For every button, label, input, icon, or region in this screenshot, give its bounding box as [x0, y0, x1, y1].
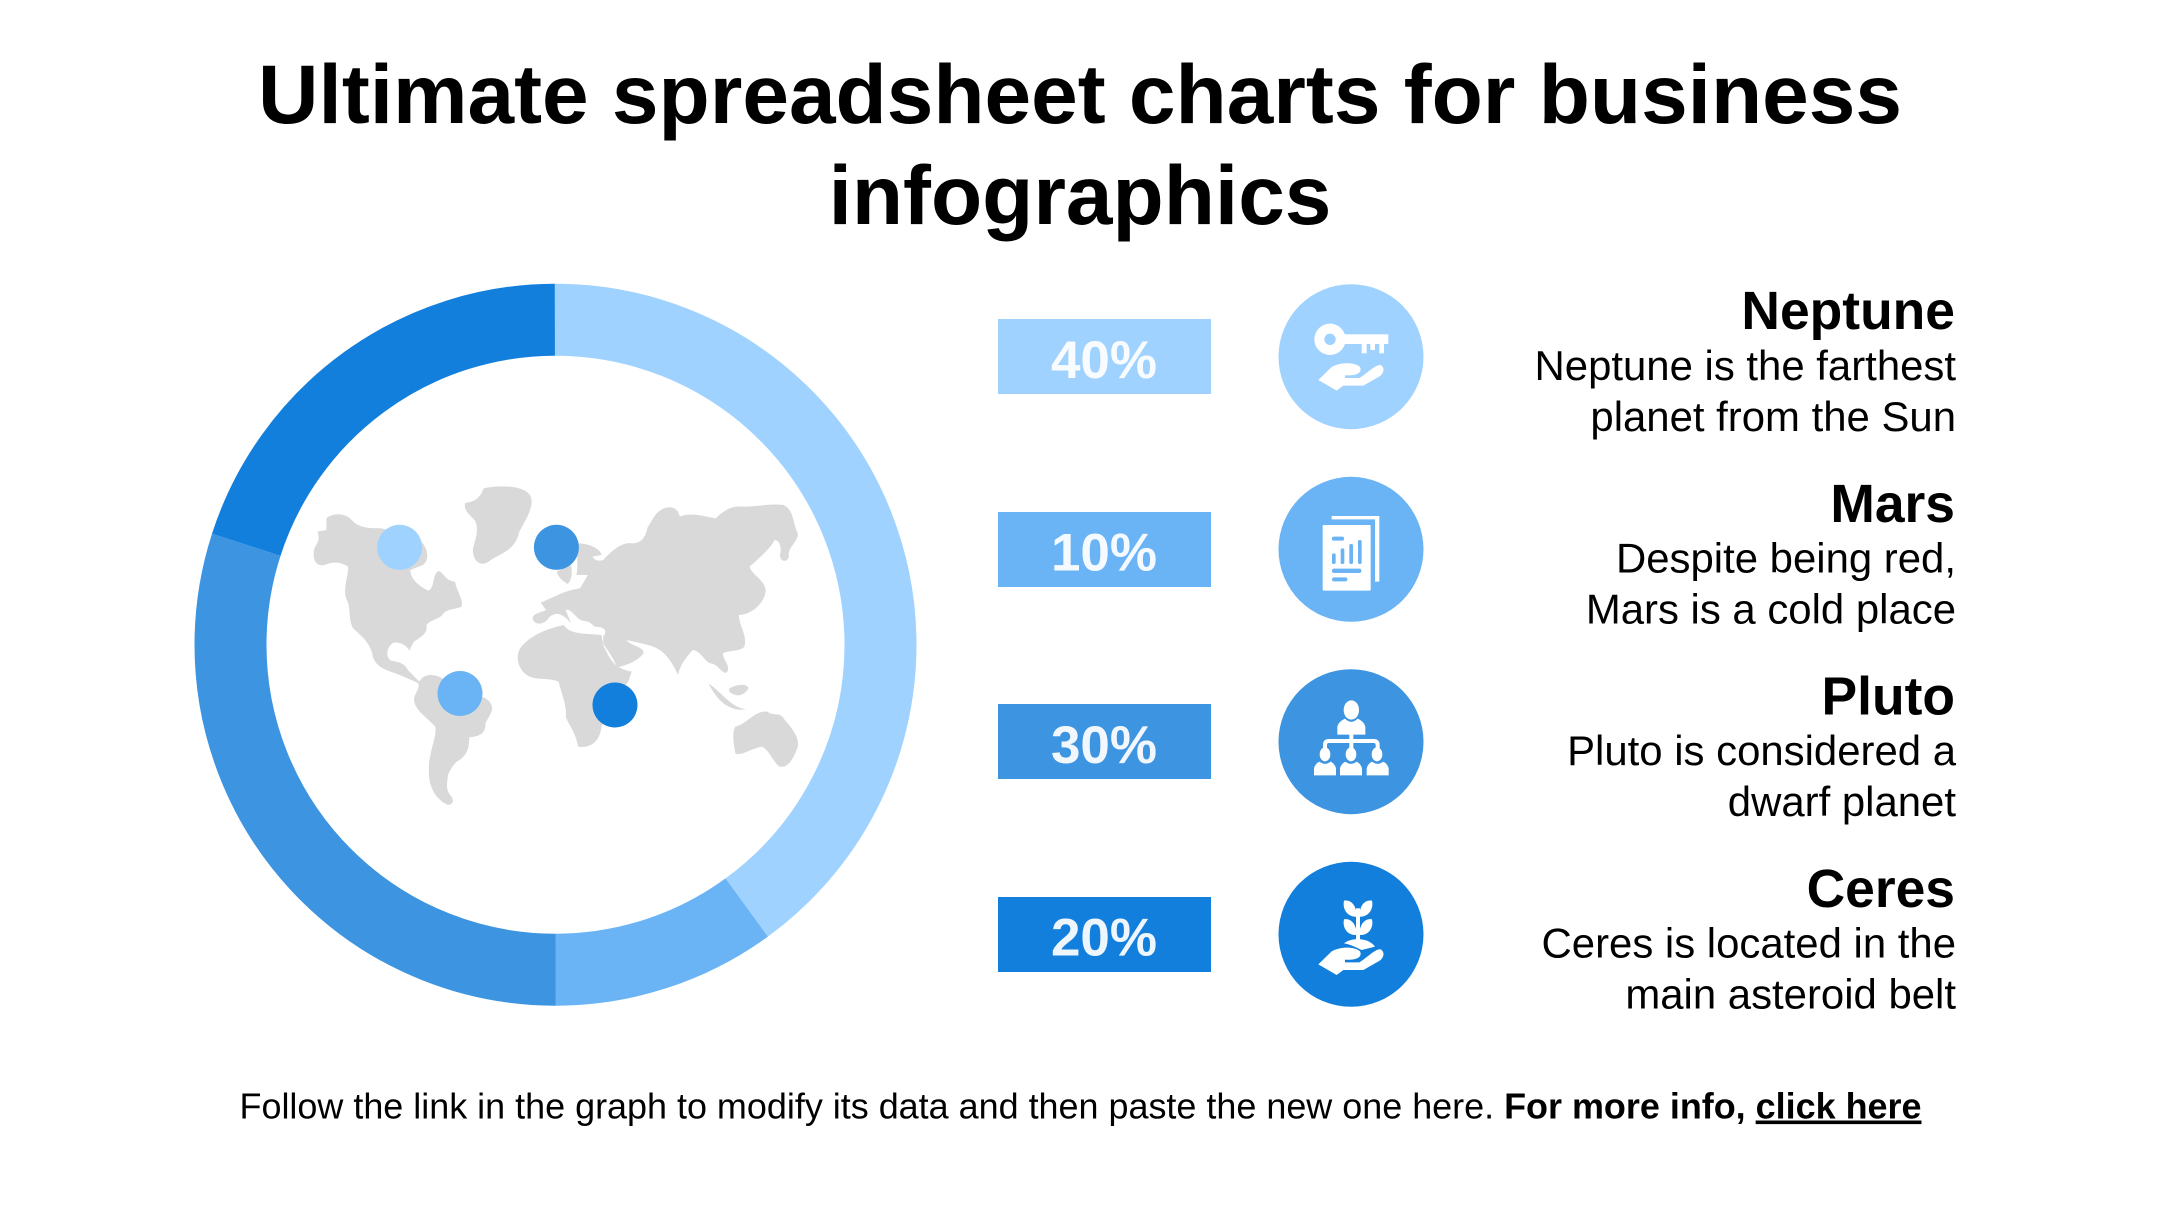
- Eurasia: [533, 505, 798, 675]
- percent bar: 20%: 20%: [1051, 908, 1157, 968]
- text: Mars: Despite being red,: [1616, 534, 1956, 582]
- text: Mars: [1586, 475, 1956, 632]
- text: Neptune: Neptune: [1741, 282, 1955, 341]
- text: Ceres: Ceres: [1807, 860, 1955, 919]
- text: Mars: Mars is a cold place: [1586, 586, 1956, 632]
- row: Ceres: [998, 860, 1956, 1018]
- text: Ceres: [1542, 860, 1956, 1018]
- segment: 20%: [230, 320, 880, 970]
- map marker: North America: [377, 525, 422, 570]
- percent bar: 40%: [998, 319, 1211, 394]
- text: Pluto: dwarf planet: [1728, 778, 1956, 825]
- percent bar: 40%: 40%: [1051, 331, 1157, 390]
- text: Neptune: Neptune is the farthest: [1535, 342, 1956, 389]
- row: Pluto: [998, 668, 1957, 825]
- icon: organisation chart: [1278, 669, 1424, 814]
- title: infographics: [829, 148, 1331, 242]
- text: Ceres: main asteroid belt: [1625, 970, 1956, 1018]
- map marker: Europe: [534, 525, 579, 570]
- Australia: [733, 712, 798, 767]
- map marker: South America: [438, 671, 482, 716]
- percent bar: 30%: 30%: [1051, 716, 1157, 775]
- Africa: [518, 625, 632, 747]
- percent bar: 10%: [998, 512, 1211, 587]
- footer note: Follow the link in the graph to modify its data and then paste the new one here. For more info, click here: [240, 1086, 1921, 1126]
- Indonesia: [709, 683, 746, 710]
- percent bar: 20%: [998, 897, 1211, 972]
- text: Pluto: Pluto is considered a: [1567, 727, 1957, 774]
- map marker: Africa: [592, 682, 638, 728]
- icon: plant in hand: [1278, 862, 1424, 1007]
- text: Pluto: Pluto: [1822, 668, 1955, 726]
- icon: key in hand: [1278, 284, 1424, 429]
- row: Neptune: [998, 282, 1956, 440]
- percent bar: 30%: [998, 704, 1211, 779]
- percent bar: 10%: 10%: [1051, 524, 1157, 582]
- segment: 40%: [230, 320, 880, 970]
- donut chart: [230, 320, 880, 970]
- row: Mars: [998, 475, 1956, 632]
- text: Mars: Mars: [1830, 475, 1955, 534]
- segment: 30%: [230, 320, 880, 970]
- text: Neptune: planet from the Sun: [1590, 393, 1956, 440]
- segment: 10%: [230, 320, 880, 970]
- Greenland: [465, 486, 532, 564]
- title: [258, 47, 1902, 242]
- title: Ultimate spreadsheet charts for business: [258, 47, 1902, 141]
- icon: report document: [1278, 477, 1424, 622]
- the Americas: [314, 514, 492, 805]
- text: Ceres: Ceres is located in the: [1542, 920, 1956, 966]
- text: Neptune: [1535, 282, 1956, 440]
- Borneo: [729, 685, 749, 695]
- United Kingdom: [557, 565, 572, 584]
- text: Pluto: [1567, 668, 1957, 825]
- world map: [314, 486, 798, 805]
